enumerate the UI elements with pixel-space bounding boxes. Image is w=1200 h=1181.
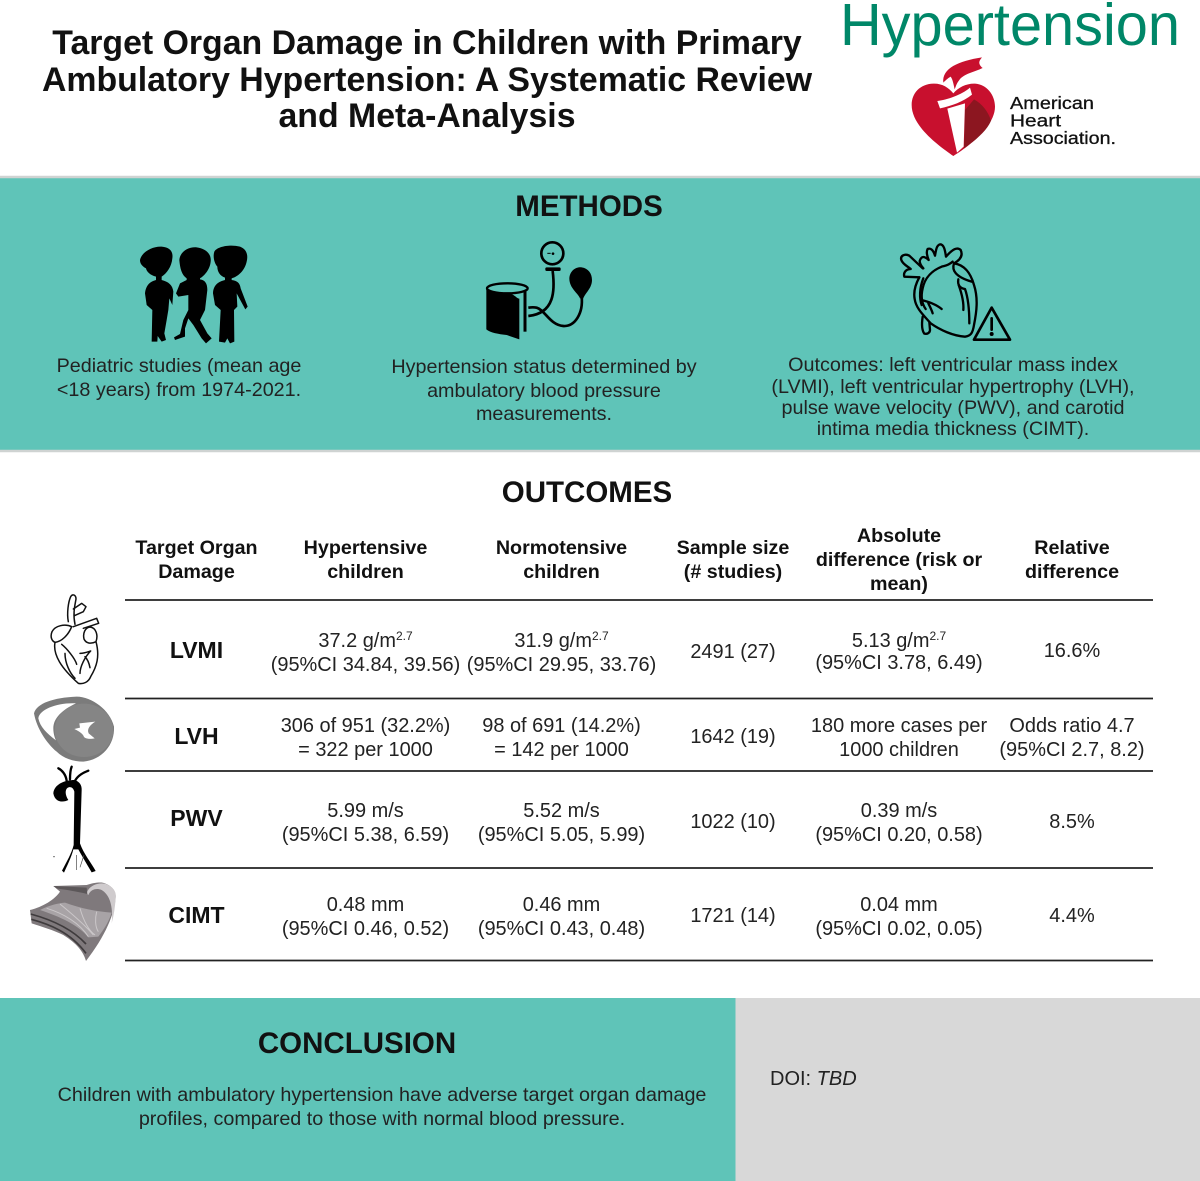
row: LVMI — [170, 629, 1101, 676]
row: CIMT: CIMT — [168, 902, 225, 928]
row: CIMT: 0.04 mm — [860, 894, 938, 916]
text: conclusion — [58, 1084, 706, 1130]
panel: DOI: DOI: TBD — [770, 1068, 857, 1090]
row: CIMT: 0.48 mm — [327, 894, 404, 916]
heading: conclusion: CONCLUSION — [258, 1027, 456, 1060]
row: LVH: 180 more cases per — [811, 715, 987, 737]
row: PWV: 5.99 m/s — [327, 800, 404, 822]
row: PWV: (95%CI 5.38, 6.59) — [282, 824, 449, 846]
row: LVMI: 31.9 g/m — [514, 630, 592, 652]
title: Ambulatory Hypertension: A Systematic Review — [42, 61, 813, 99]
row: LVMI: 2491 (27) — [690, 641, 776, 663]
row: PWV — [170, 800, 1095, 846]
icon: three children silhouettes — [140, 246, 248, 343]
table header: Hypertensive — [304, 537, 427, 559]
row: LVH: = 322 per 1000 — [298, 739, 433, 761]
row: CIMT: 0.46 mm — [523, 894, 600, 916]
row: LVH: = 142 per 1000 — [494, 739, 629, 761]
heading: methods: METHODS — [515, 190, 663, 223]
table header: Damage — [158, 561, 235, 583]
text: studies: Pediatric studies (mean age — [57, 355, 301, 377]
panel: DOI — [736, 998, 1200, 1181]
table header: difference — [1025, 561, 1119, 583]
title — [42, 24, 813, 135]
text: conclusion: profiles, compared to those with normal blood pressure. — [139, 1108, 625, 1130]
icon: heart with warning triangle — [901, 244, 1010, 340]
row: PWV: 5.52 m/s — [523, 800, 600, 822]
row: PWV: 0.39 m/s — [861, 800, 937, 822]
row: CIMT: (95%CI 0.46, 0.52) — [282, 918, 449, 940]
row: LVMI: 2.7 — [592, 629, 609, 643]
table header: Absolute — [857, 525, 941, 547]
icon: heart outline for LVMI — [51, 595, 99, 684]
icon: left ventricle cross-section for LVH — [34, 697, 114, 762]
panel: conclusion — [0, 998, 736, 1181]
text: studies: <18 years) from 1974-2021. — [57, 379, 301, 401]
icon: artery wall layers for CIMT — [30, 883, 116, 961]
row: CIMT: 1721 (14) — [690, 905, 776, 927]
row: LVMI: (95%CI 3.78, 6.49) — [815, 652, 983, 674]
row: PWV: 1022 (10) — [690, 811, 776, 833]
text: outcomes: intima media thickness (CIMT). — [817, 418, 1089, 440]
panel: methods — [0, 177, 1200, 451]
row: LVH: 98 of 691 (14.2%) — [482, 715, 641, 737]
row: PWV: 8.5% — [1049, 811, 1095, 833]
row: LVMI: 5.13 g/m — [852, 630, 929, 652]
table header: Normotensive — [496, 537, 627, 559]
row: LVMI: 2.7 — [929, 629, 946, 643]
row: LVH: 1642 (19) — [690, 726, 776, 748]
row: CIMT: 4.4% — [1049, 905, 1095, 927]
text: conclusion: Children with ambulatory hypertension have adverse target organ damage — [58, 1084, 706, 1106]
table header: difference (risk or — [816, 549, 982, 571]
row: LVMI: (95%CI 34.84, 39.56) — [271, 654, 460, 676]
title: and Meta-Analysis — [278, 97, 576, 135]
logo: American Heart Association: American — [1010, 93, 1094, 113]
row: LVMI: (95%CI 29.95, 33.76) — [467, 654, 656, 676]
row: LVH: 1000 children — [839, 739, 959, 761]
table header: Relative — [1034, 537, 1110, 559]
row: LVH: (95%CI 2.7, 8.2) — [999, 739, 1145, 761]
row: PWV: (95%CI 0.20, 0.58) — [815, 824, 983, 846]
text: hypertension status — [391, 356, 697, 425]
row: LVMI: 16.6% — [1044, 640, 1101, 662]
table header: children — [327, 561, 404, 583]
text: outcomes: pulse wave velocity (PWV), and carotid — [781, 397, 1125, 419]
text: hypertension status: measurements. — [476, 403, 612, 425]
row: LVH: 306 of 951 (32.2%) — [281, 715, 450, 737]
row: LVH: LVH — [174, 723, 219, 749]
table header: Target Organ — [135, 537, 258, 559]
logo: American Heart Association: Heart — [1010, 110, 1061, 130]
row: LVMI: 37.2 g/m — [318, 630, 396, 652]
title: Target Organ Damage in Children with Primary — [52, 24, 802, 62]
text: outcomes: (LVMI), left ventricular hypertrophy (LVH), — [771, 376, 1135, 398]
icon: blood pressure cuff — [486, 242, 592, 339]
text: outcomes: Outcomes: left ventricular mass index — [788, 354, 1118, 376]
row: LVH — [174, 715, 1145, 761]
icon: heart and torch — [912, 57, 995, 156]
text: outcomes — [771, 354, 1135, 440]
table header: mean) — [870, 573, 928, 595]
row: LVMI: LVMI — [170, 637, 223, 663]
row: CIMT: (95%CI 0.43, 0.48) — [478, 918, 645, 940]
icon: aorta for PWV — [53, 767, 96, 873]
table header: children — [523, 561, 600, 583]
text: hypertension status: Hypertension status determined by — [391, 356, 697, 378]
row: PWV: (95%CI 5.05, 5.99) — [478, 824, 645, 846]
row: CIMT: (95%CI 0.02, 0.05) — [815, 918, 983, 940]
table header: (# studies) — [684, 561, 782, 583]
row: CIMT — [168, 894, 1095, 940]
heading: outcomes: OUTCOMES — [502, 476, 672, 509]
text: studies — [57, 355, 301, 401]
table header — [135, 525, 1119, 595]
row: LVH: Odds ratio 4.7 — [1009, 715, 1135, 737]
table: outcomes — [125, 525, 1153, 960]
logo: American Heart Association — [912, 57, 1116, 156]
text: hypertension status: ambulatory blood pressure — [427, 380, 661, 402]
table header: Sample size — [677, 537, 789, 559]
row: PWV: PWV — [170, 805, 223, 831]
logo: American Heart Association: Association. — [1010, 128, 1116, 148]
row: LVMI: 2.7 — [396, 629, 413, 643]
